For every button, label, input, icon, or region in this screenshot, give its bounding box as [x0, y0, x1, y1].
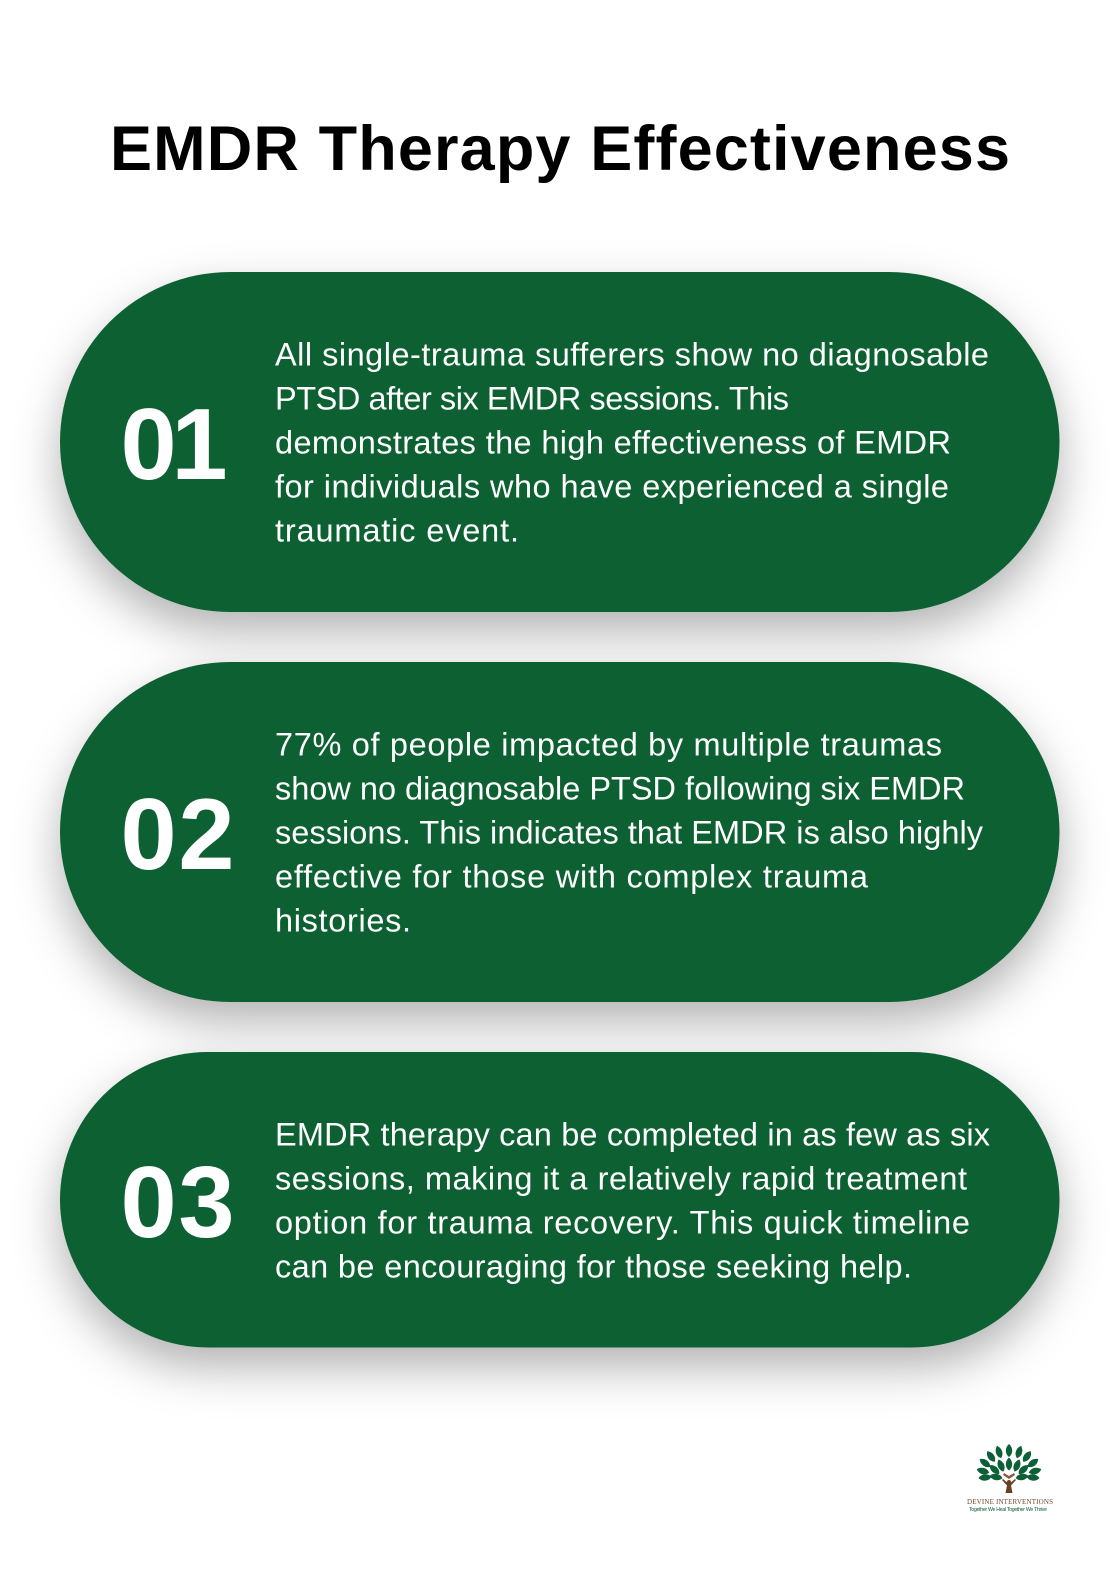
- figure: [1002, 1479, 1016, 1493]
- icon: tree: [976, 1444, 1042, 1493]
- panel: card 02: [60, 662, 1060, 1002]
- head: [1007, 1480, 1011, 1484]
- number 03: 03: [120, 1147, 234, 1259]
- logo tagline: Together We Heal Together We Thrive: [969, 1507, 1047, 1513]
- text block 02: sessions. This indicates that EMDR is also highly: [275, 814, 984, 850]
- logo: Devine Interventions: [967, 1444, 1053, 1513]
- pill background 03: [60, 1052, 1060, 1348]
- number 01: 01: [120, 389, 228, 501]
- text block 01: PTSD after six EMDR sessions. This: [275, 380, 789, 416]
- text block 02: show no diagnosable PTSD following six EMDR: [275, 770, 965, 806]
- text block 03: [275, 1116, 990, 1284]
- text block 02: histories.: [275, 902, 411, 938]
- title: EMDR Therapy Effectiveness: [110, 114, 1010, 184]
- text block 01: for individuals who have experienced a single: [275, 468, 949, 504]
- text block 03: can be encouraging for those seeking help.: [275, 1248, 912, 1284]
- text block 02: [275, 726, 984, 938]
- logo name: DEVINE INTERVENTIONS: [967, 1498, 1053, 1506]
- text block 01: demonstrates the high effectiveness of EMDR: [275, 424, 951, 460]
- raised hands: [1003, 1473, 1015, 1479]
- pill background 02: [60, 662, 1060, 1002]
- number 02: 02: [120, 779, 234, 891]
- text block 03: sessions, making it a relatively rapid treatment: [275, 1160, 967, 1196]
- panel: card 01: [60, 272, 1060, 612]
- text block 01: [275, 336, 989, 548]
- text block 02: effective for those with complex trauma: [275, 858, 869, 894]
- text block 01: All single-trauma sufferers show no diagnosable: [275, 336, 989, 372]
- panel: card 03: [60, 1052, 1060, 1348]
- text block 02: 77% of people impacted by multiple traumas: [275, 726, 942, 762]
- text block 03: option for trauma recovery. This quick timeline: [275, 1204, 970, 1240]
- text block 03: EMDR therapy can be completed in as few as six: [275, 1116, 990, 1152]
- text block 01: traumatic event.: [275, 512, 519, 548]
- pill background 01: [60, 272, 1060, 612]
